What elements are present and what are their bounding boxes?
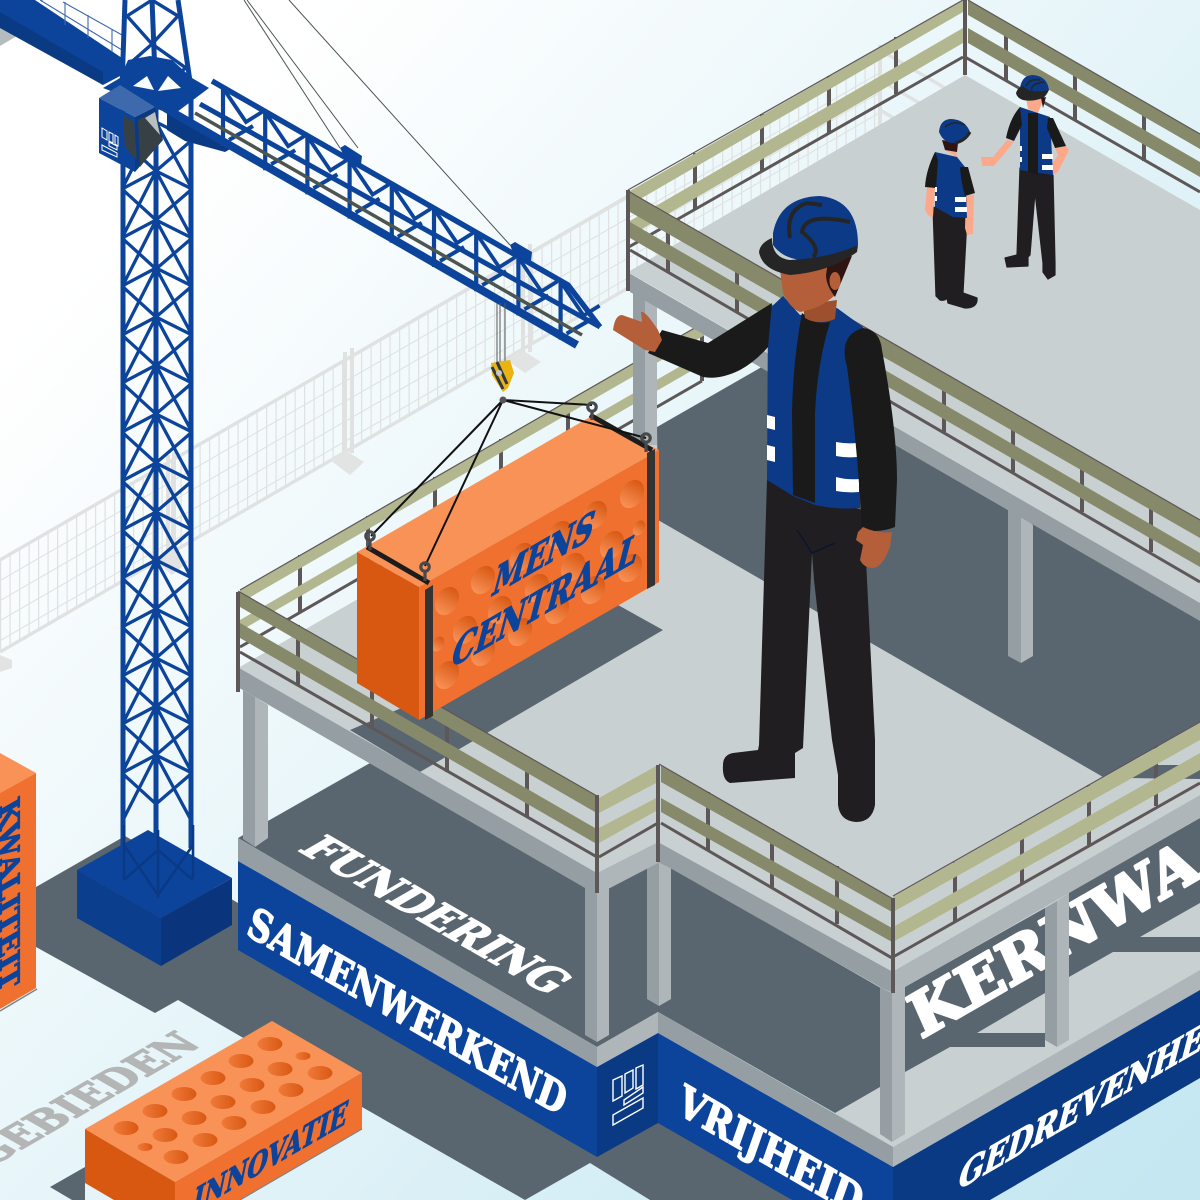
left hand bbox=[613, 312, 662, 352]
neck bbox=[803, 300, 837, 322]
logo on plinth bbox=[613, 1065, 643, 1125]
upper floor bbox=[628, 75, 1200, 621]
rear railing, upper floor bbox=[627, 0, 1200, 248]
helmet bbox=[773, 196, 858, 260]
background fence bbox=[0, 45, 945, 672]
crane platform bbox=[103, 56, 209, 115]
middle floor bbox=[238, 364, 1200, 972]
front railing, left wing bbox=[238, 591, 597, 857]
brick: kwaliteit bbox=[0, 753, 37, 1011]
brick text: MENS bbox=[487, 500, 600, 608]
front railing, upper floor bbox=[628, 190, 1200, 582]
right hand bbox=[856, 527, 892, 568]
ground slab bbox=[36, 836, 792, 1200]
brick: innovatie bbox=[50, 1021, 362, 1200]
trousers and boots bbox=[723, 480, 875, 822]
reflective stripes bbox=[767, 415, 859, 492]
cables bbox=[244, 0, 510, 245]
hook and slings bbox=[366, 303, 650, 581]
hanging brick: mens centraal bbox=[357, 415, 659, 720]
label: samenwerkend: SAMENWERKEND bbox=[242, 897, 573, 1125]
main worker bbox=[613, 196, 897, 822]
hanging brick: mens centraal: CENTRAAL bbox=[446, 521, 645, 680]
counter jib bbox=[0, 0, 122, 85]
plinth with blue bands bbox=[238, 838, 1200, 1200]
right arm sleeve bbox=[845, 328, 897, 531]
left arm sleeve bbox=[648, 303, 772, 378]
vest bbox=[767, 296, 863, 509]
straps bbox=[425, 585, 433, 720]
small worker, front view bbox=[981, 75, 1069, 279]
crane bbox=[0, 0, 600, 966]
crane block bbox=[77, 830, 232, 966]
shirt bbox=[792, 313, 830, 503]
front railing, centre wing bbox=[659, 764, 893, 958]
upper column bbox=[633, 285, 1033, 663]
trouser creases bbox=[797, 530, 835, 553]
rear railing, middle floor bbox=[240, 322, 705, 647]
crane tower bbox=[122, 0, 193, 898]
crane cabin bbox=[99, 85, 163, 172]
hair bbox=[826, 256, 852, 297]
ground floor bbox=[238, 763, 1200, 1147]
notch railing bbox=[597, 765, 658, 893]
label: fundering: FUNDERING bbox=[287, 829, 585, 1001]
beams under middle floor bbox=[239, 668, 1200, 993]
small worker, back view bbox=[925, 119, 977, 308]
front railing, right wing bbox=[893, 722, 1200, 993]
jib bbox=[165, 81, 600, 345]
face bbox=[780, 262, 835, 312]
lower columns bbox=[243, 690, 1069, 1142]
